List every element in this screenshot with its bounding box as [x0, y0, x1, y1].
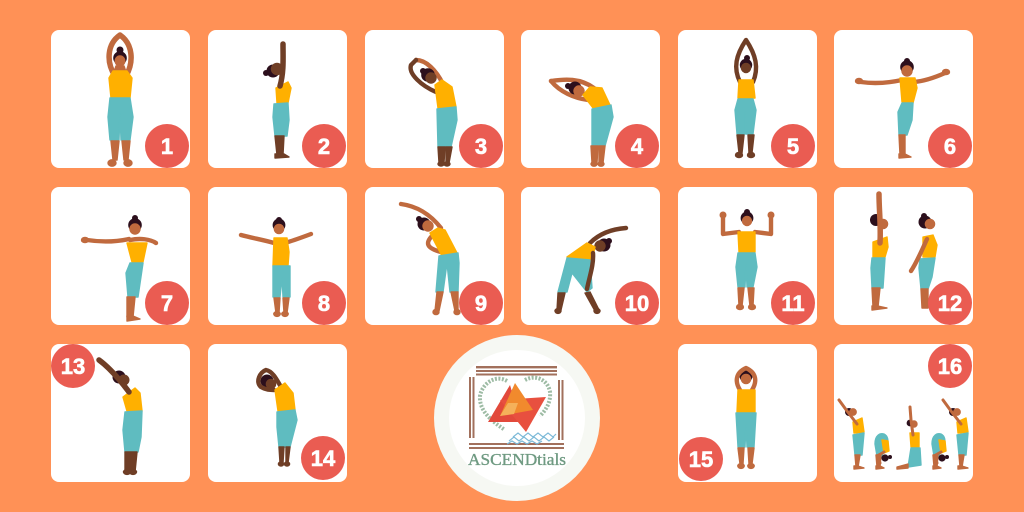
figure: pose 11 [720, 209, 774, 310]
badge: 12: 12 [938, 291, 962, 316]
badge: 3: 3 [475, 134, 487, 159]
figure: pose 14 [258, 370, 297, 466]
figure: sequence, kneeling [897, 407, 921, 469]
figure: pose 1 [108, 35, 133, 166]
badge: 4: 4 [631, 134, 644, 159]
badge: 16: 16 [938, 354, 962, 379]
badge: 11: 11 [781, 291, 805, 316]
badge: 8: 8 [318, 291, 330, 316]
badge: 13: 13 [61, 354, 85, 379]
figure: pose 15 [736, 368, 756, 468]
logo frame [469, 366, 564, 449]
badge: 2: 2 [318, 134, 330, 159]
panel: pose 13 [51, 344, 190, 482]
panel: pose 1 [51, 30, 190, 168]
figure: sequence, arms back repeat [943, 400, 968, 469]
badge: 5: 5 [787, 134, 799, 159]
badge: 10: 10 [625, 291, 649, 316]
logo triangles [488, 383, 546, 432]
logo waves [507, 433, 556, 444]
panel: pose 4 [521, 30, 660, 168]
figure: pose 8 [241, 217, 311, 316]
panel: pose 16 [834, 344, 973, 482]
logo wordmark: ASCENDtials [468, 450, 566, 469]
panel: pose 15 [678, 344, 817, 482]
figure: sequence, forward fold mirrored [932, 434, 949, 469]
panel: pose 8 [208, 187, 347, 325]
figure: pose 13 [99, 360, 142, 474]
panel: pose 10 [521, 187, 660, 325]
badge: 7: 7 [161, 291, 173, 316]
badge: 1: 1 [161, 134, 173, 159]
badge: 14: 14 [311, 446, 336, 471]
logo wreath [480, 378, 550, 430]
panel: pose 9 [365, 187, 504, 325]
figure: sequence, forward fold [875, 434, 892, 469]
figure: pose 3 [411, 60, 457, 166]
figure: pose 2 [263, 44, 291, 158]
figure: pose 6 [856, 58, 950, 158]
figure: pose 4 [551, 80, 613, 166]
panel: pose 11 [678, 187, 817, 325]
panel: pose 7 [51, 187, 190, 325]
badge: 15: 15 [689, 447, 713, 472]
figure: pose 12, arms raised [870, 194, 888, 310]
panel: pose 14 [208, 344, 347, 482]
panel: pose 3 [365, 30, 504, 168]
panel: pose 12 [834, 187, 973, 325]
figure: pose 9 [401, 204, 460, 315]
figure: pose 5 [735, 40, 756, 158]
figure: sequence, arms back [839, 400, 864, 469]
figure: pose 10 [555, 228, 626, 313]
figure: pose 7 [82, 215, 156, 321]
panel: pose 5 [678, 30, 817, 168]
logo badge: ASCENDtials [434, 335, 600, 501]
badge: 6: 6 [944, 134, 956, 159]
figure: pose 12, arms lowered [911, 213, 937, 308]
badge: 9: 9 [475, 291, 487, 316]
panel: pose 6 [834, 30, 973, 168]
panel: pose 2 [208, 30, 347, 168]
